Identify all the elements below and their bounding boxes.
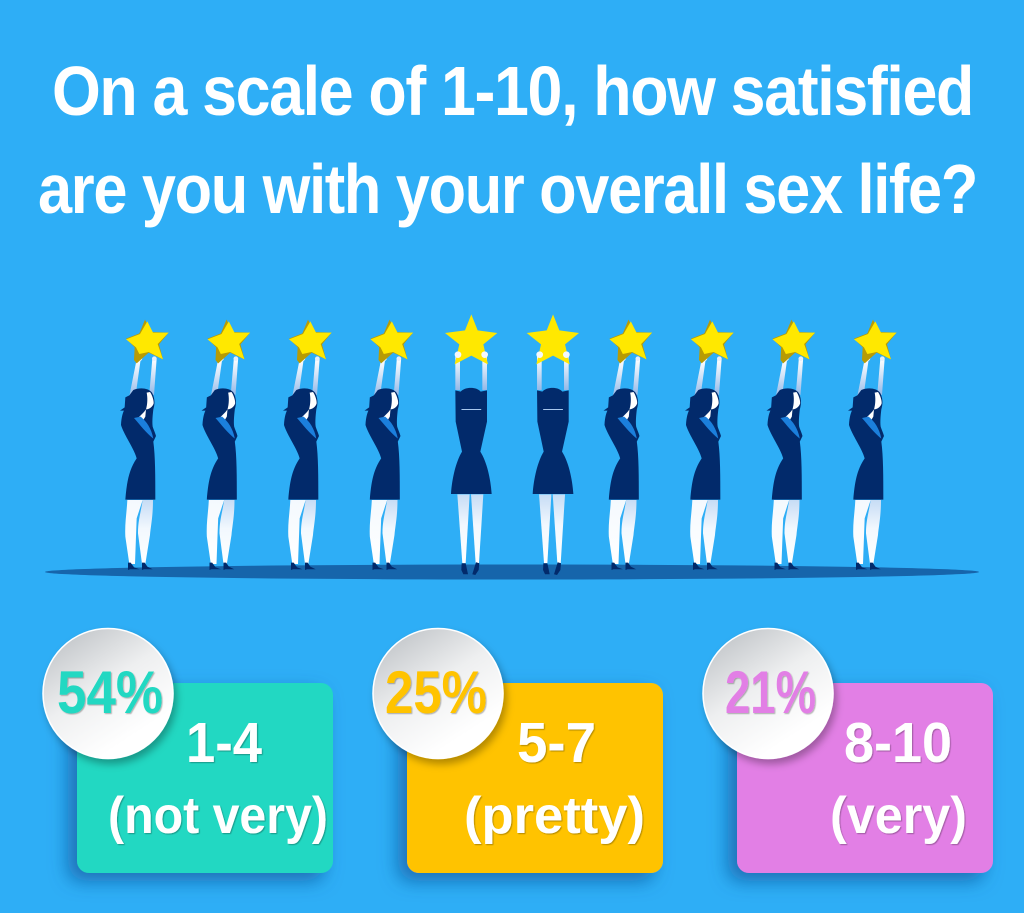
figure 3 with star xyxy=(283,320,332,570)
percent value: 25% xyxy=(385,659,487,726)
yellow card xyxy=(407,683,663,873)
panel: 54% rated 1-4 xyxy=(43,628,333,873)
pink card xyxy=(737,683,993,873)
percent disc xyxy=(43,628,173,758)
figure 6 with star, back view xyxy=(527,314,579,575)
range label: 1-4 xyxy=(186,711,262,775)
descriptor: (pretty) xyxy=(464,787,645,845)
percent value: 21% xyxy=(725,659,816,726)
teal card xyxy=(77,683,333,873)
title xyxy=(38,52,977,228)
figure 2 with star xyxy=(201,320,250,570)
range label: 5-7 xyxy=(517,711,596,775)
figure 9 with star xyxy=(766,320,815,570)
panel: 21% rated 8-10 xyxy=(703,628,993,873)
descriptor: (not very) xyxy=(108,787,328,845)
percent disc xyxy=(703,628,833,758)
illustration: ten women holding up stars xyxy=(120,314,897,575)
panel: 25% rated 5-7 xyxy=(373,628,663,873)
percent value: 54% xyxy=(57,659,163,726)
range label: 8-10 xyxy=(844,711,952,775)
figure 5 with star, back view xyxy=(445,314,497,575)
illustration: ground shadow xyxy=(45,564,979,580)
percent disc xyxy=(373,628,503,758)
figure 8 with star xyxy=(685,320,734,570)
figure 1 with star xyxy=(120,320,169,570)
figure 4 with star xyxy=(364,320,413,570)
figure 10 with star xyxy=(848,320,897,570)
figure 7 with star xyxy=(603,320,652,570)
descriptor: (very) xyxy=(830,787,967,845)
